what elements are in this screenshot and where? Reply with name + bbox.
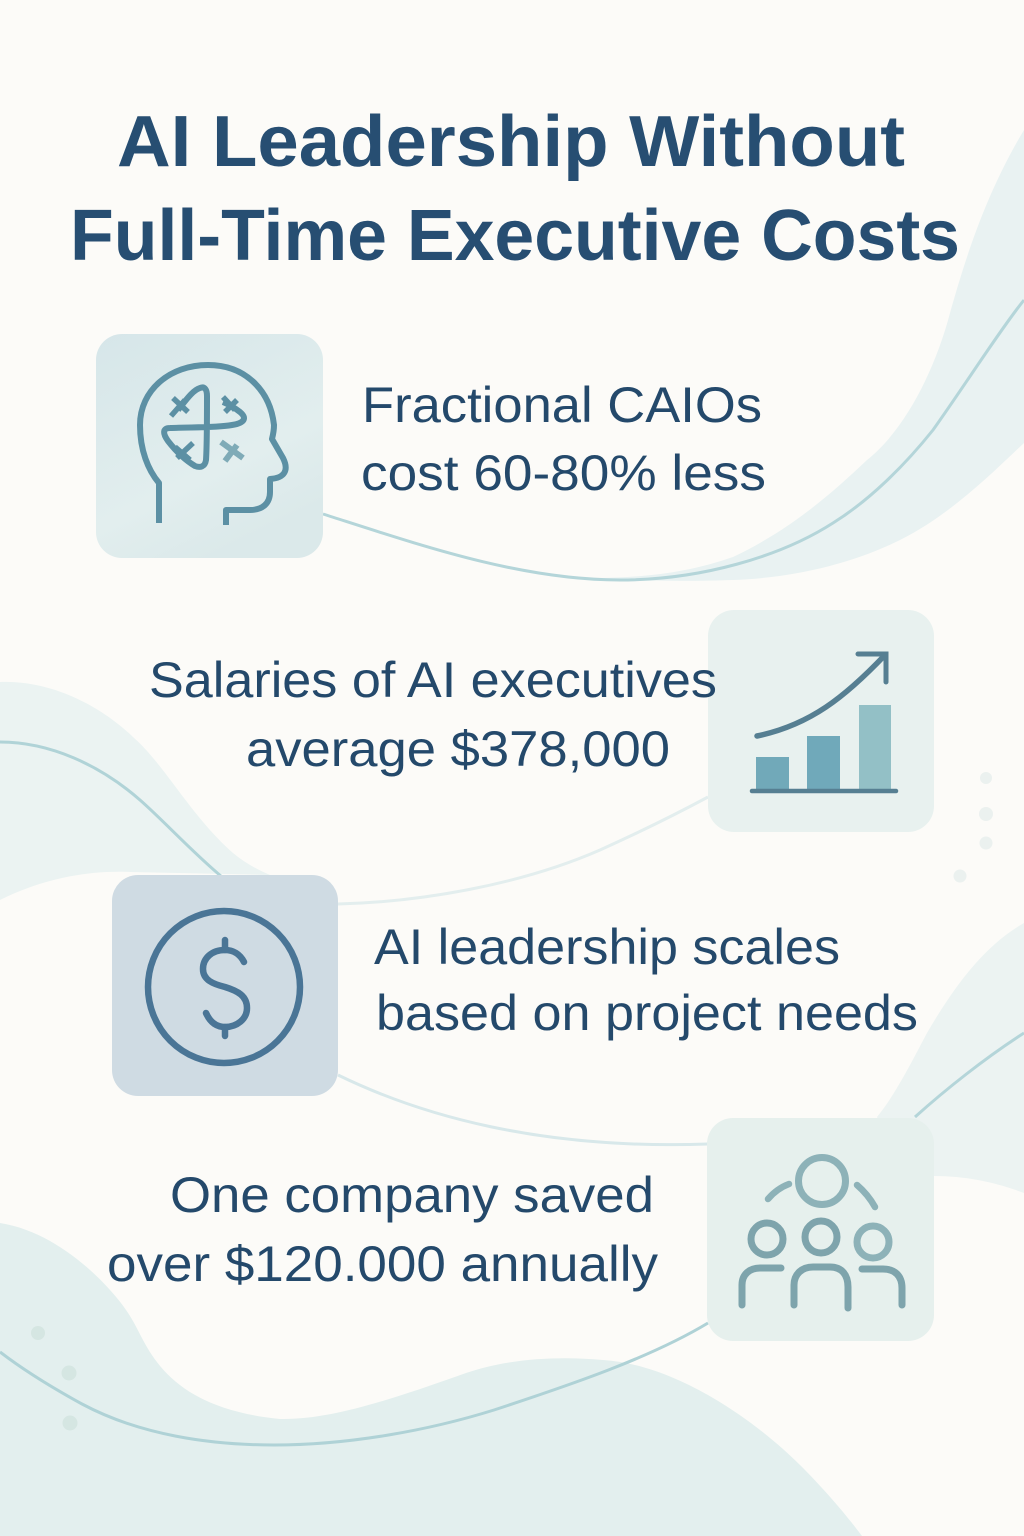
text: fractional CAIOs — [361, 377, 766, 501]
text: salaries — [149, 652, 717, 777]
connector line: sixth curve — [0, 1323, 708, 1445]
icon tile: head — [96, 334, 323, 558]
decorative dots: right — [954, 772, 993, 882]
connector line: second curve — [0, 742, 222, 877]
icon: rising bar chart — [752, 654, 896, 791]
text: salaries: average $378,000 — [246, 721, 670, 777]
icon: team of people — [742, 1158, 902, 1308]
connector line: third curve — [338, 797, 708, 904]
background wave: top right — [600, 130, 1024, 581]
title: Full-Time Executive Costs — [70, 196, 960, 276]
icon tile: dollar — [112, 875, 338, 1096]
decorative dots: bottom left — [31, 1326, 78, 1430]
text: scaling leadership: based on project needs — [376, 985, 918, 1041]
icon tile: chart — [708, 610, 934, 832]
text: company savings: One company saved — [170, 1167, 654, 1223]
icon: dollar coin — [148, 911, 300, 1063]
panel: fractional CAIOs — [96, 334, 766, 558]
panel: scaling leadership — [112, 875, 918, 1096]
background wave: bottom — [0, 1223, 862, 1536]
background wave: middle left — [0, 682, 270, 900]
panel: company savings — [107, 1118, 934, 1341]
text: fractional CAIOs: cost 60-80% less — [361, 445, 766, 501]
text: salaries: Salaries of AI executives — [149, 652, 717, 708]
text: fractional CAIOs: Fractional CAIOs — [362, 377, 762, 433]
text: company savings — [107, 1167, 658, 1292]
icon: head with strategy marks — [140, 365, 286, 525]
connector line: fourth curve — [338, 1075, 708, 1145]
icon tile: team — [707, 1118, 934, 1341]
title — [70, 102, 960, 276]
text: scaling leadership — [374, 919, 918, 1041]
text: company savings: over $120.000 annually — [107, 1236, 658, 1292]
panel: salaries — [149, 610, 934, 832]
background wave: lower right — [877, 923, 1024, 1193]
connector line: first curve — [323, 300, 1024, 580]
connector line: fifth curve — [915, 1033, 1024, 1117]
text: scaling leadership: AI leadership scales — [374, 919, 840, 975]
title: AI Leadership Without — [117, 102, 905, 182]
